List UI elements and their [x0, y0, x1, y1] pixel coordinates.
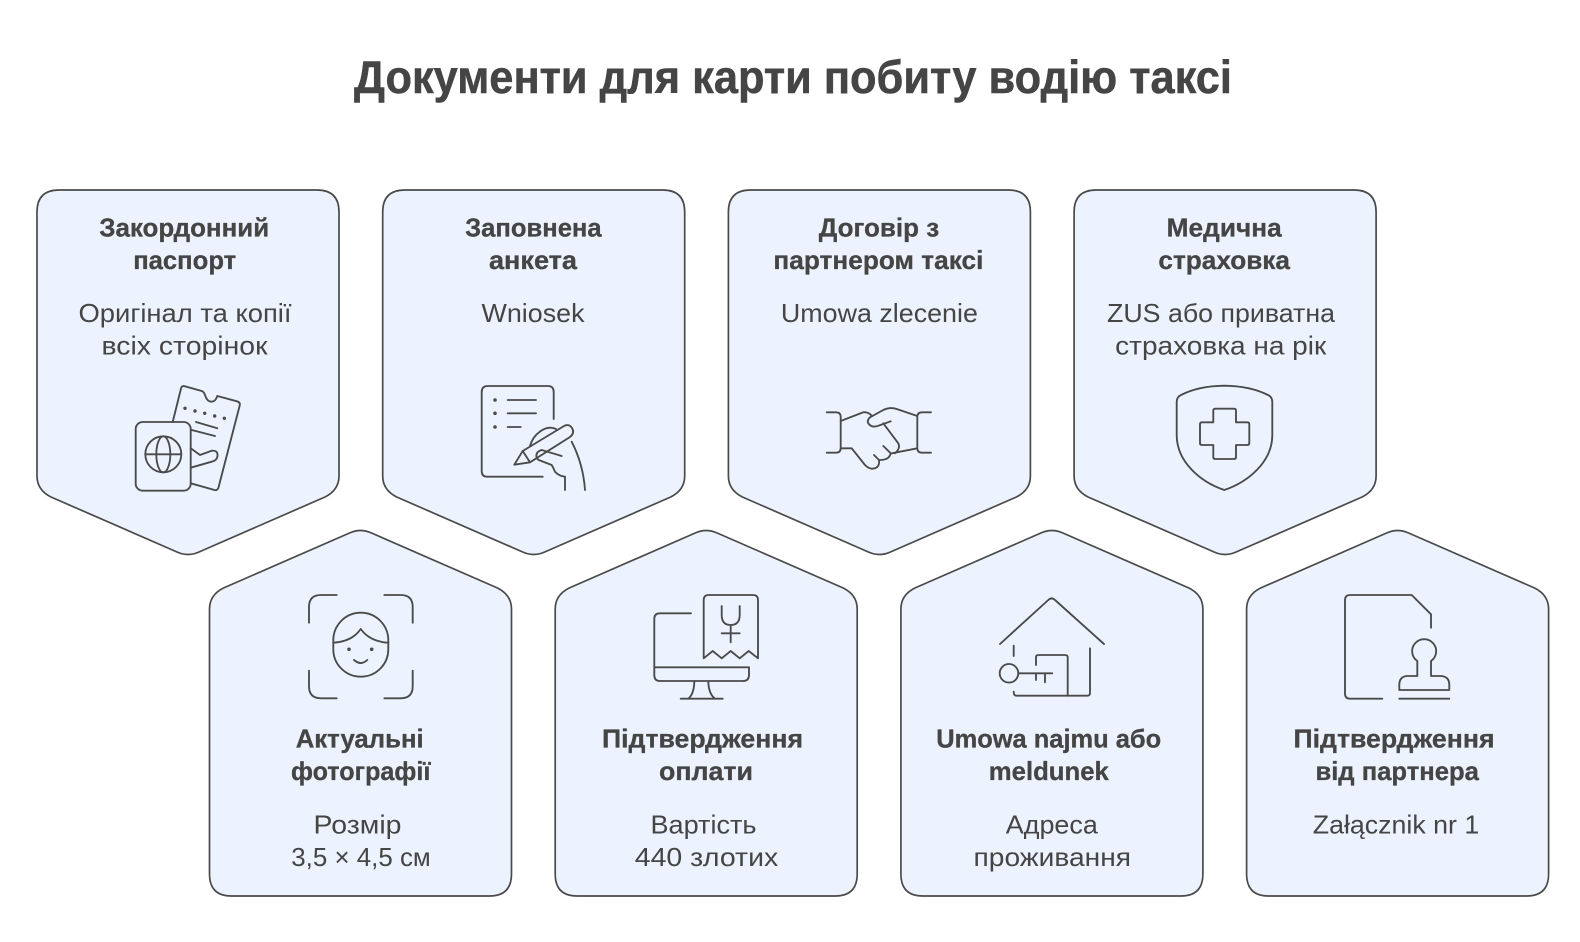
icon: form and writing hand — [482, 386, 585, 490]
heading — [602, 724, 803, 786]
icon: monitor and receipt — [654, 595, 758, 699]
heading: Закордонний — [99, 212, 269, 242]
panel: актуальні фотографії — [210, 530, 512, 896]
description — [635, 810, 778, 872]
panel: заповнена анкета — [383, 190, 685, 554]
description — [291, 810, 431, 872]
panel: підтвердження оплати — [555, 530, 857, 896]
heading: Заповнена — [465, 212, 602, 242]
card shape — [383, 190, 685, 554]
card shape — [37, 190, 339, 554]
card shape — [210, 530, 512, 896]
panel: медична страховка — [1074, 190, 1376, 554]
heading: Актуальні — [296, 724, 424, 754]
heading: Підтвердження — [1294, 724, 1494, 754]
icon: house and key — [1000, 598, 1104, 696]
description: проживання — [974, 842, 1131, 872]
heading: Umowa najmu або — [936, 724, 1161, 754]
description: страховка на рік — [1115, 330, 1327, 360]
heading — [99, 212, 269, 275]
panel: підтвердження від партнера — [1247, 530, 1549, 896]
description: Załącznik nr 1 — [1313, 810, 1479, 840]
heading: Медична — [1167, 212, 1282, 242]
panel: закордонний паспорт — [37, 190, 339, 554]
card shape — [555, 530, 857, 896]
description: Розмір — [314, 810, 402, 840]
heading: страховка — [1158, 245, 1290, 275]
heading — [291, 724, 431, 786]
card shape — [1247, 530, 1549, 896]
heading: оплати — [659, 756, 753, 786]
description: Umowa zlecenie — [781, 298, 978, 328]
heading — [936, 724, 1161, 786]
description — [1107, 298, 1336, 360]
heading — [465, 212, 602, 275]
description: Вартість — [650, 810, 756, 840]
description: Адреса — [1006, 810, 1098, 840]
heading: Підтвердження — [602, 724, 803, 754]
card shape — [901, 530, 1203, 896]
card shape — [1074, 190, 1376, 554]
heading — [773, 212, 983, 275]
heading: від партнера — [1315, 756, 1479, 786]
title: Документи для карти побиту водію таксі — [354, 51, 1232, 103]
card shape — [728, 190, 1030, 554]
description: всіх сторінок — [102, 330, 268, 360]
heading: анкета — [489, 245, 578, 275]
description — [974, 810, 1131, 872]
icon: face scan — [309, 595, 413, 698]
heading — [1158, 212, 1290, 275]
panel: umowa najmu або meldunek — [901, 530, 1203, 896]
heading: meldunek — [989, 756, 1109, 786]
description: 3,5 × 4,5 см — [291, 842, 431, 872]
description — [78, 298, 292, 360]
description: Оригінал та копії — [78, 298, 292, 328]
icon: shield with cross — [1177, 386, 1272, 490]
heading: паспорт — [133, 245, 236, 275]
heading — [1294, 724, 1494, 786]
heading: партнером таксі — [773, 245, 983, 275]
description: ZUS або приватна — [1107, 298, 1336, 328]
icon: passport and ticket — [136, 386, 240, 491]
icon: document and stamp — [1345, 595, 1449, 699]
heading: Договір з — [819, 212, 939, 242]
icon: handshake — [827, 408, 931, 469]
description: 440 злотих — [635, 842, 778, 872]
panel: договір з партнером таксі — [728, 190, 1030, 554]
description: Wniosek — [482, 298, 586, 328]
heading: фотографії — [291, 756, 431, 786]
